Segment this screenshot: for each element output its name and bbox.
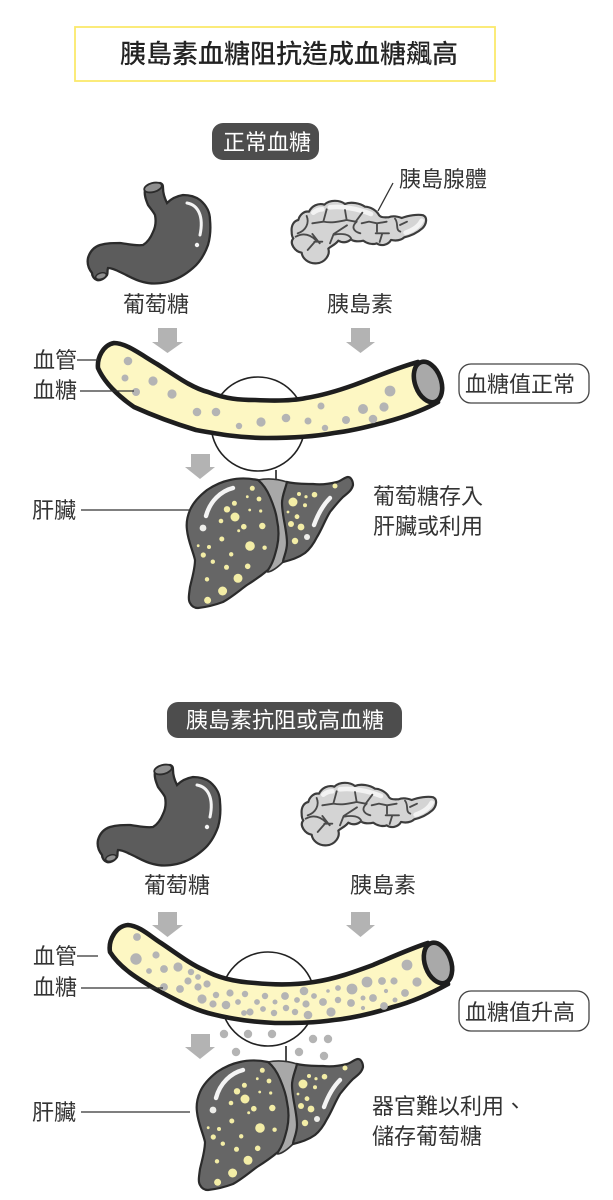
icon: blood vessel bbox=[98, 343, 447, 438]
label: glucose: 葡萄糖 bbox=[144, 873, 210, 898]
arrow: glucose down bbox=[152, 328, 183, 353]
label: blood vessel: 血管 bbox=[33, 944, 77, 969]
leader line: blood vessel bbox=[77, 359, 98, 361]
icon: stomach bbox=[88, 181, 210, 284]
leader line: blood sugar bbox=[80, 390, 134, 392]
arrow: to liver bbox=[185, 454, 215, 479]
text: organs struggle to use glucose bbox=[372, 1094, 526, 1149]
callout: normal blood sugar value: 血糖值正常 bbox=[465, 372, 575, 397]
text: glucose stored: 肝臟或利用 bbox=[373, 514, 483, 539]
leader line: liver bbox=[81, 509, 189, 511]
label: insulin: 胰島素 bbox=[350, 873, 416, 898]
text: organs struggle to use glucose: 器官難以利用、 bbox=[372, 1094, 526, 1119]
leaked glucose dots bbox=[220, 1030, 332, 1060]
icon: pancreas bbox=[302, 783, 436, 845]
label: blood sugar: 血糖 bbox=[33, 975, 77, 1000]
callout: high blood sugar value: 血糖值升高 bbox=[465, 1000, 575, 1025]
panel: insulin resistance bbox=[32, 702, 589, 1190]
leader line: liver bbox=[81, 1111, 190, 1113]
leader line: pancreas bbox=[378, 183, 393, 211]
arrow: insulin down bbox=[346, 912, 375, 937]
label: blood sugar: 血糖 bbox=[33, 378, 77, 403]
leader line: blood sugar bbox=[81, 987, 163, 989]
arrow: to liver bbox=[185, 1034, 215, 1059]
label: liver: 肝臟 bbox=[32, 498, 76, 523]
callout: normal blood sugar value bbox=[459, 364, 589, 403]
panel: normal blood sugar bbox=[32, 123, 589, 608]
icon: stomach bbox=[98, 763, 220, 866]
icon: liver bbox=[197, 1059, 363, 1190]
label: glucose: 葡萄糖 bbox=[123, 292, 189, 317]
arrow: insulin down bbox=[346, 328, 375, 353]
icon: liver bbox=[187, 477, 353, 608]
text: glucose stored bbox=[373, 484, 483, 539]
text: glucose stored: 葡萄糖存入 bbox=[373, 484, 483, 509]
label: blood vessel: 血管 bbox=[33, 348, 77, 373]
leader line: blood vessel bbox=[77, 955, 98, 957]
arrow: glucose down bbox=[152, 912, 183, 937]
title bbox=[75, 27, 495, 81]
text: organs struggle to use glucose: 儲存葡萄糖 bbox=[372, 1124, 482, 1149]
heading: insulin resistance: 胰島素抗阻或高血糖 bbox=[186, 708, 384, 733]
title: 胰島素血糖阻抗造成血糖飆高 bbox=[120, 39, 458, 69]
label: pancreas: 胰島腺體 bbox=[399, 167, 487, 192]
callout: high blood sugar value bbox=[459, 991, 589, 1031]
label: insulin: 胰島素 bbox=[327, 292, 393, 317]
zoom circle bbox=[211, 377, 305, 496]
icon: blood vessel with high sugar bbox=[110, 925, 457, 1023]
heading: insulin resistance bbox=[167, 702, 402, 738]
label: liver: 肝臟 bbox=[32, 1100, 76, 1125]
heading: normal blood sugar: 正常血糖 bbox=[223, 130, 311, 155]
icon: pancreas bbox=[292, 201, 426, 263]
heading: normal blood sugar bbox=[212, 123, 319, 160]
zoom circle bbox=[221, 952, 315, 1080]
